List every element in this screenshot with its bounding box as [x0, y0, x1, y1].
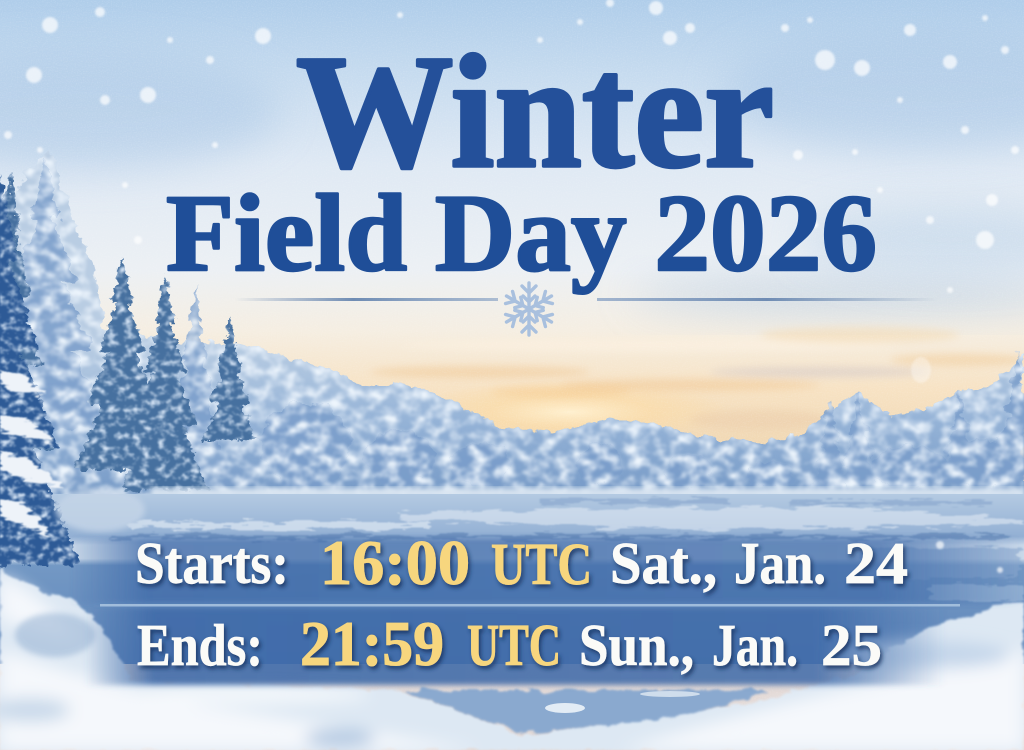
- end time line: Ends:: [137, 612, 263, 678]
- start time line: 24: [844, 530, 908, 596]
- title: Field Day 2026: Field Day 2026: [166, 172, 877, 294]
- start time line: Starts:: [135, 530, 289, 596]
- start time line: Sat.,: [610, 530, 717, 596]
- start time line: UTC: [491, 531, 592, 597]
- time panel background: [70, 538, 1024, 685]
- end time line: UTC: [467, 612, 561, 678]
- end time line: 25: [821, 612, 882, 678]
- icon: snowflake: [503, 283, 555, 335]
- snowy foreground: [0, 568, 1024, 750]
- divider line left: [235, 298, 498, 301]
- end time line: Sun.,: [579, 612, 694, 678]
- end time line: [137, 608, 882, 679]
- frozen lake: [0, 494, 1024, 664]
- falling snow: [4, 0, 1019, 573]
- end time line: 21:59: [300, 608, 444, 679]
- left snowy fir tree: [0, 175, 145, 565]
- forest treeline: [0, 150, 1024, 500]
- title: Winter: Winter: [296, 23, 774, 202]
- end time line: Jan.: [712, 612, 798, 678]
- start time line: [135, 527, 908, 598]
- start time line: Jan.: [734, 530, 826, 596]
- start time line: 16:00: [320, 527, 470, 598]
- divider line right: [597, 298, 937, 301]
